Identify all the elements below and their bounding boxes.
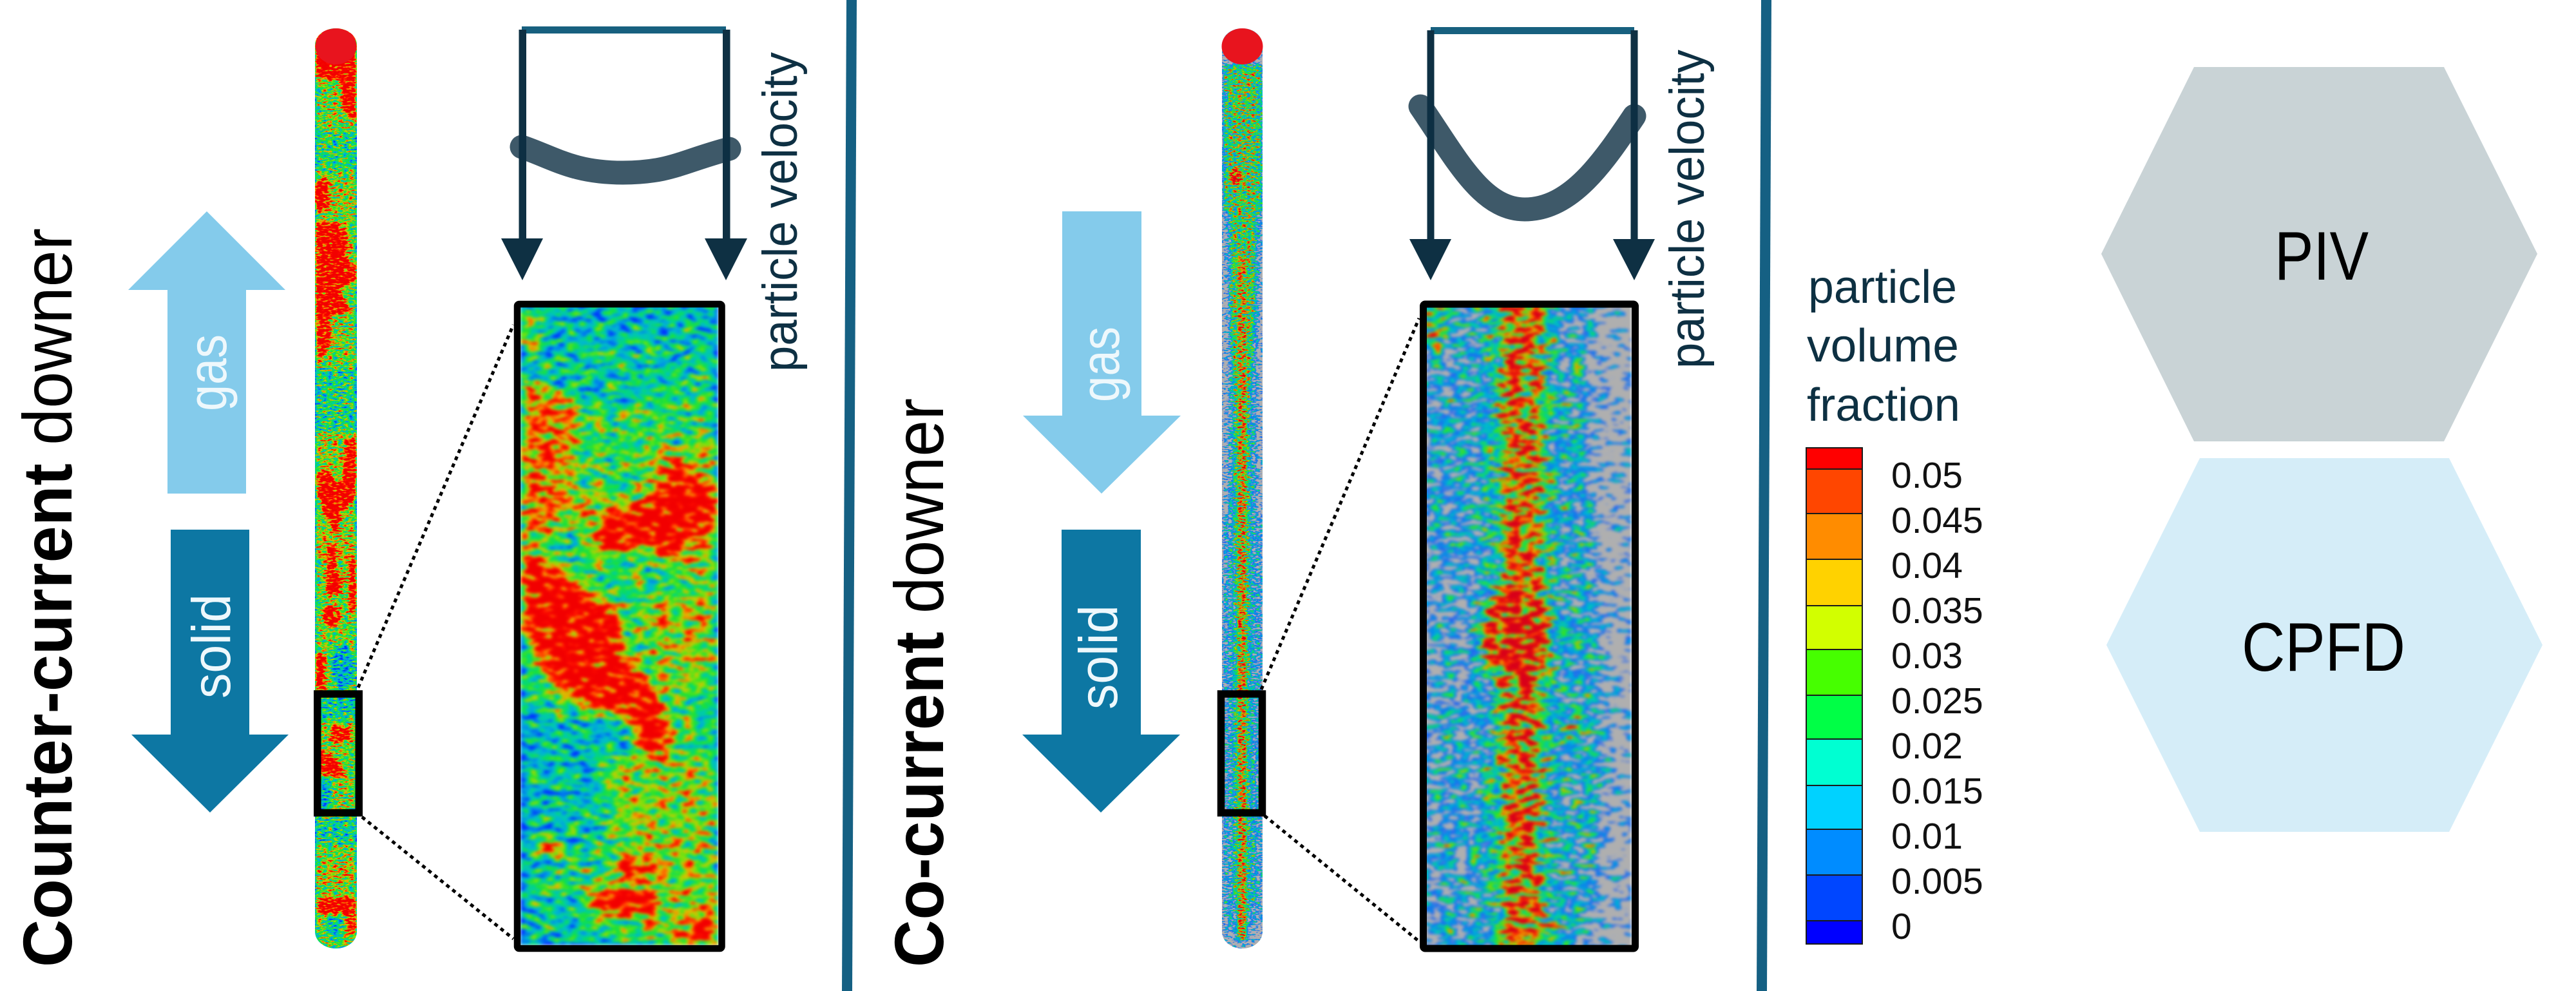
arrow: gas flowing downward: gas: [1070, 327, 1131, 402]
connector: dotted line top: [358, 325, 513, 688]
velocity profile: flat curve between walls with arrows: [501, 26, 747, 280]
hexagon: CPFD: CPFD: [2242, 608, 2405, 686]
heading: co-current downer: Co-current downer: [880, 398, 958, 967]
connector: dotted line bottom: [1264, 816, 1419, 941]
legend title: particle: [1808, 262, 1957, 313]
legend title: volume: [1807, 320, 1959, 372]
colour bar tick labels: 0.035: [1891, 590, 1983, 631]
arrow: gas flowing upward: gas: [177, 334, 238, 411]
chart: full column particle volume fraction contour: [313, 28, 357, 948]
colour bar tick labels: 0.025: [1891, 680, 1983, 722]
hexagon: PIV: [2101, 67, 2537, 441]
colour bar tick labels: 0.04: [1891, 545, 1963, 586]
heading: counter-current downer: Counter-current downer: [8, 228, 86, 967]
arrow: solid flowing downward: solid: [181, 594, 242, 698]
hexagon: PIV: PIV: [2275, 217, 2369, 294]
arrow: solid flowing downward: [1022, 530, 1180, 813]
legend: particle volume fraction colour scale: [1806, 262, 1983, 947]
colour bar tick labels: 0: [1891, 906, 1912, 947]
chart: zoomed contour inset: [1415, 296, 1635, 954]
colour bar tick labels: 0.05: [1891, 455, 1963, 496]
frame: zoomed region on column: [318, 694, 359, 813]
connector: dotted line bottom: [362, 817, 513, 939]
colour bar tick labels: 0.045: [1891, 500, 1983, 541]
colour bar tick labels: 0.02: [1891, 726, 1963, 767]
colour bar tick labels: 0.015: [1891, 771, 1983, 812]
divider: between co-current panel and legend: [1757, 0, 1771, 991]
legend title: [1807, 262, 1960, 431]
label: particle velocity: particle velocity: [1660, 50, 1715, 369]
colour bar: [1806, 448, 1862, 944]
arrow: solid flowing downward: solid: [1068, 605, 1129, 709]
velocity profile: parabolic curve between walls with arrows: [1409, 27, 1655, 280]
arrow: gas flowing upward: [128, 211, 285, 494]
arrow: solid flowing downward: [131, 530, 289, 813]
colour bar tick labels: [1891, 455, 1983, 947]
hexagon: CPFD: [2106, 458, 2543, 832]
colour bar tick labels: 0.01: [1891, 816, 1963, 857]
label: particle velocity: particle velocity: [753, 52, 808, 372]
chart: full column particle volume fraction contour: [1221, 28, 1263, 948]
frame: zoomed region on column: [1221, 694, 1263, 813]
arrow: gas flowing downward: [1023, 211, 1181, 494]
panel: co-current downer: [880, 27, 1715, 967]
chart: zoomed contour inset: [517, 296, 721, 948]
legend title: fraction: [1807, 380, 1960, 431]
colour bar tick labels: 0.03: [1891, 635, 1963, 677]
panel: counter-current downer: [8, 26, 808, 967]
connector: dotted line top: [1261, 318, 1419, 689]
colour bar tick labels: 0.005: [1891, 861, 1983, 902]
divider: between counter-current and co-current panels: [842, 0, 857, 991]
